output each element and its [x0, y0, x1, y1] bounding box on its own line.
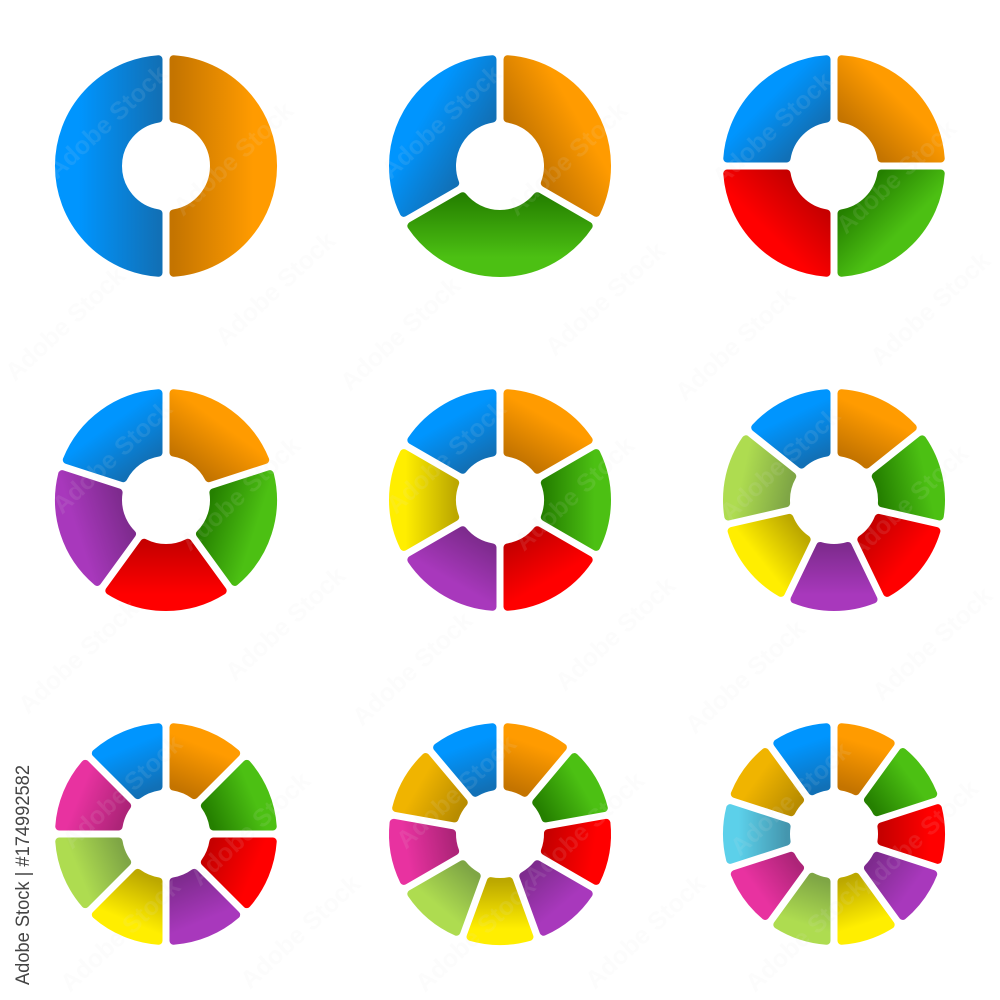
donut: 10 segments — [727, 724, 941, 944]
segment: blue — [57, 380, 187, 499]
segment: red — [881, 808, 941, 860]
segment: lime — [721, 438, 798, 528]
watermark pattern: Adobe Stock — [185, 767, 316, 891]
segment: purple — [153, 864, 238, 946]
watermark pattern: Adobe Stock — [210, 227, 341, 351]
segment: green — [189, 459, 285, 587]
watermark pattern: Adobe Stock — [707, 67, 838, 191]
segment: orange — [145, 380, 275, 499]
segment: purple — [508, 851, 591, 935]
segment: red — [845, 498, 942, 598]
watermark pattern: Adobe Stock — [502, 97, 633, 221]
segment: green — [526, 755, 607, 836]
donut: 8 segments — [54, 722, 278, 946]
watermark pattern: Adobe Stock — [13, 595, 144, 719]
segment: green — [857, 750, 936, 827]
watermark pattern: Adobe Stock — [220, 562, 351, 686]
segment: blue — [436, 723, 512, 800]
segment: orange — [482, 384, 594, 485]
segment: orange — [488, 723, 564, 800]
segment: yellow — [726, 498, 823, 598]
segment: red — [482, 515, 594, 616]
segment: blue — [363, 36, 518, 228]
segment: magenta — [732, 841, 811, 918]
watermark pattern: Adobe Stock — [865, 247, 996, 371]
segment: gold — [732, 750, 811, 827]
watermark pattern: Adobe Stock — [175, 432, 306, 556]
donut: 2 segments — [59, 59, 273, 273]
segment: magenta — [54, 762, 136, 847]
segment: green — [196, 762, 278, 847]
segment: yellow — [393, 453, 455, 547]
donut: 7 segments — [721, 386, 947, 607]
watermark pattern: Adobe Stock — [580, 870, 711, 994]
watermark pattern: Adobe Stock — [740, 873, 871, 997]
segment: green — [812, 144, 959, 291]
watermark pattern: Adobe Stock — [168, 97, 299, 221]
watermark pattern: Adobe Stock — [853, 775, 984, 899]
watermark pattern: Adobe Stock — [680, 615, 811, 739]
segment: purple — [857, 841, 936, 918]
watermark pattern: Adobe Stock — [550, 572, 681, 696]
segment: cyan — [727, 808, 787, 860]
watermark pattern: Adobe Stock — [540, 237, 671, 361]
watermark pattern: Adobe Stock — [391, 730, 522, 854]
donut: 4 segments — [709, 41, 959, 291]
watermark pattern: Adobe Stock — [47, 395, 178, 519]
watermark pattern: Adobe Stock — [55, 873, 186, 997]
watermark pattern: Adobe Stock — [715, 402, 846, 526]
donut: 6 segments — [393, 384, 607, 616]
watermark pattern: Adobe Stock — [519, 767, 650, 891]
watermark pattern: Adobe Stock — [831, 115, 962, 239]
segment: magenta — [390, 813, 459, 882]
segment: purple — [47, 459, 143, 587]
watermark pattern: Adobe Stock — [42, 60, 173, 184]
watermark pattern: Adobe Stock — [725, 737, 856, 861]
watermark pattern: Adobe Stock — [867, 582, 998, 706]
segment: yellow — [824, 871, 892, 944]
watermark pattern: Adobe Stock — [235, 870, 366, 994]
segment: blue — [776, 724, 844, 797]
segment: red — [541, 813, 610, 882]
segment: lime — [409, 851, 492, 935]
segment: blue — [94, 722, 179, 804]
segment: orange — [812, 41, 959, 188]
segment: green — [870, 438, 947, 528]
segment: orange — [482, 36, 637, 228]
watermark pattern: Adobe Stock — [347, 607, 478, 731]
segment: orange — [174, 59, 273, 273]
donut: 5 segments — [47, 380, 285, 607]
segment: yellow — [471, 881, 529, 941]
segment: blue — [406, 384, 518, 485]
donut: 3 segments — [363, 36, 637, 273]
segment: red — [109, 543, 223, 607]
watermark pattern: Adobe Stock — [0, 262, 131, 386]
segment: orange — [818, 386, 916, 476]
segment: purple — [406, 515, 518, 616]
segment: gold — [393, 755, 474, 836]
segment: purple — [794, 546, 874, 607]
segment: orange — [153, 722, 238, 804]
segment: red — [709, 144, 856, 291]
segment: yellow — [94, 864, 179, 946]
segment: orange — [824, 724, 892, 797]
watermark pattern: Adobe Stock — [670, 282, 801, 406]
segment: green — [545, 453, 607, 547]
segment: red — [196, 821, 278, 906]
donut: 9 segments — [390, 723, 610, 941]
segment: lime — [776, 871, 844, 944]
watermark pattern: Adobe Stock — [376, 60, 507, 184]
segment: blue — [709, 41, 856, 188]
watermark pattern: Adobe Stock — [335, 272, 466, 396]
watermark pattern: Adobe Stock — [410, 873, 541, 997]
segment: blue — [752, 386, 850, 476]
watermark pattern: Adobe Stock — [381, 395, 512, 519]
watermark pattern: Adobe Stock — [57, 730, 188, 854]
segment: lime — [54, 821, 136, 906]
watermark pattern: Adobe Stock — [509, 432, 640, 556]
watermark pattern: Adobe Stock — [843, 440, 974, 564]
segment: blue — [59, 59, 158, 273]
segment: green — [411, 196, 589, 273]
credit text: Adobe Stock | #174992582 — [13, 765, 34, 985]
